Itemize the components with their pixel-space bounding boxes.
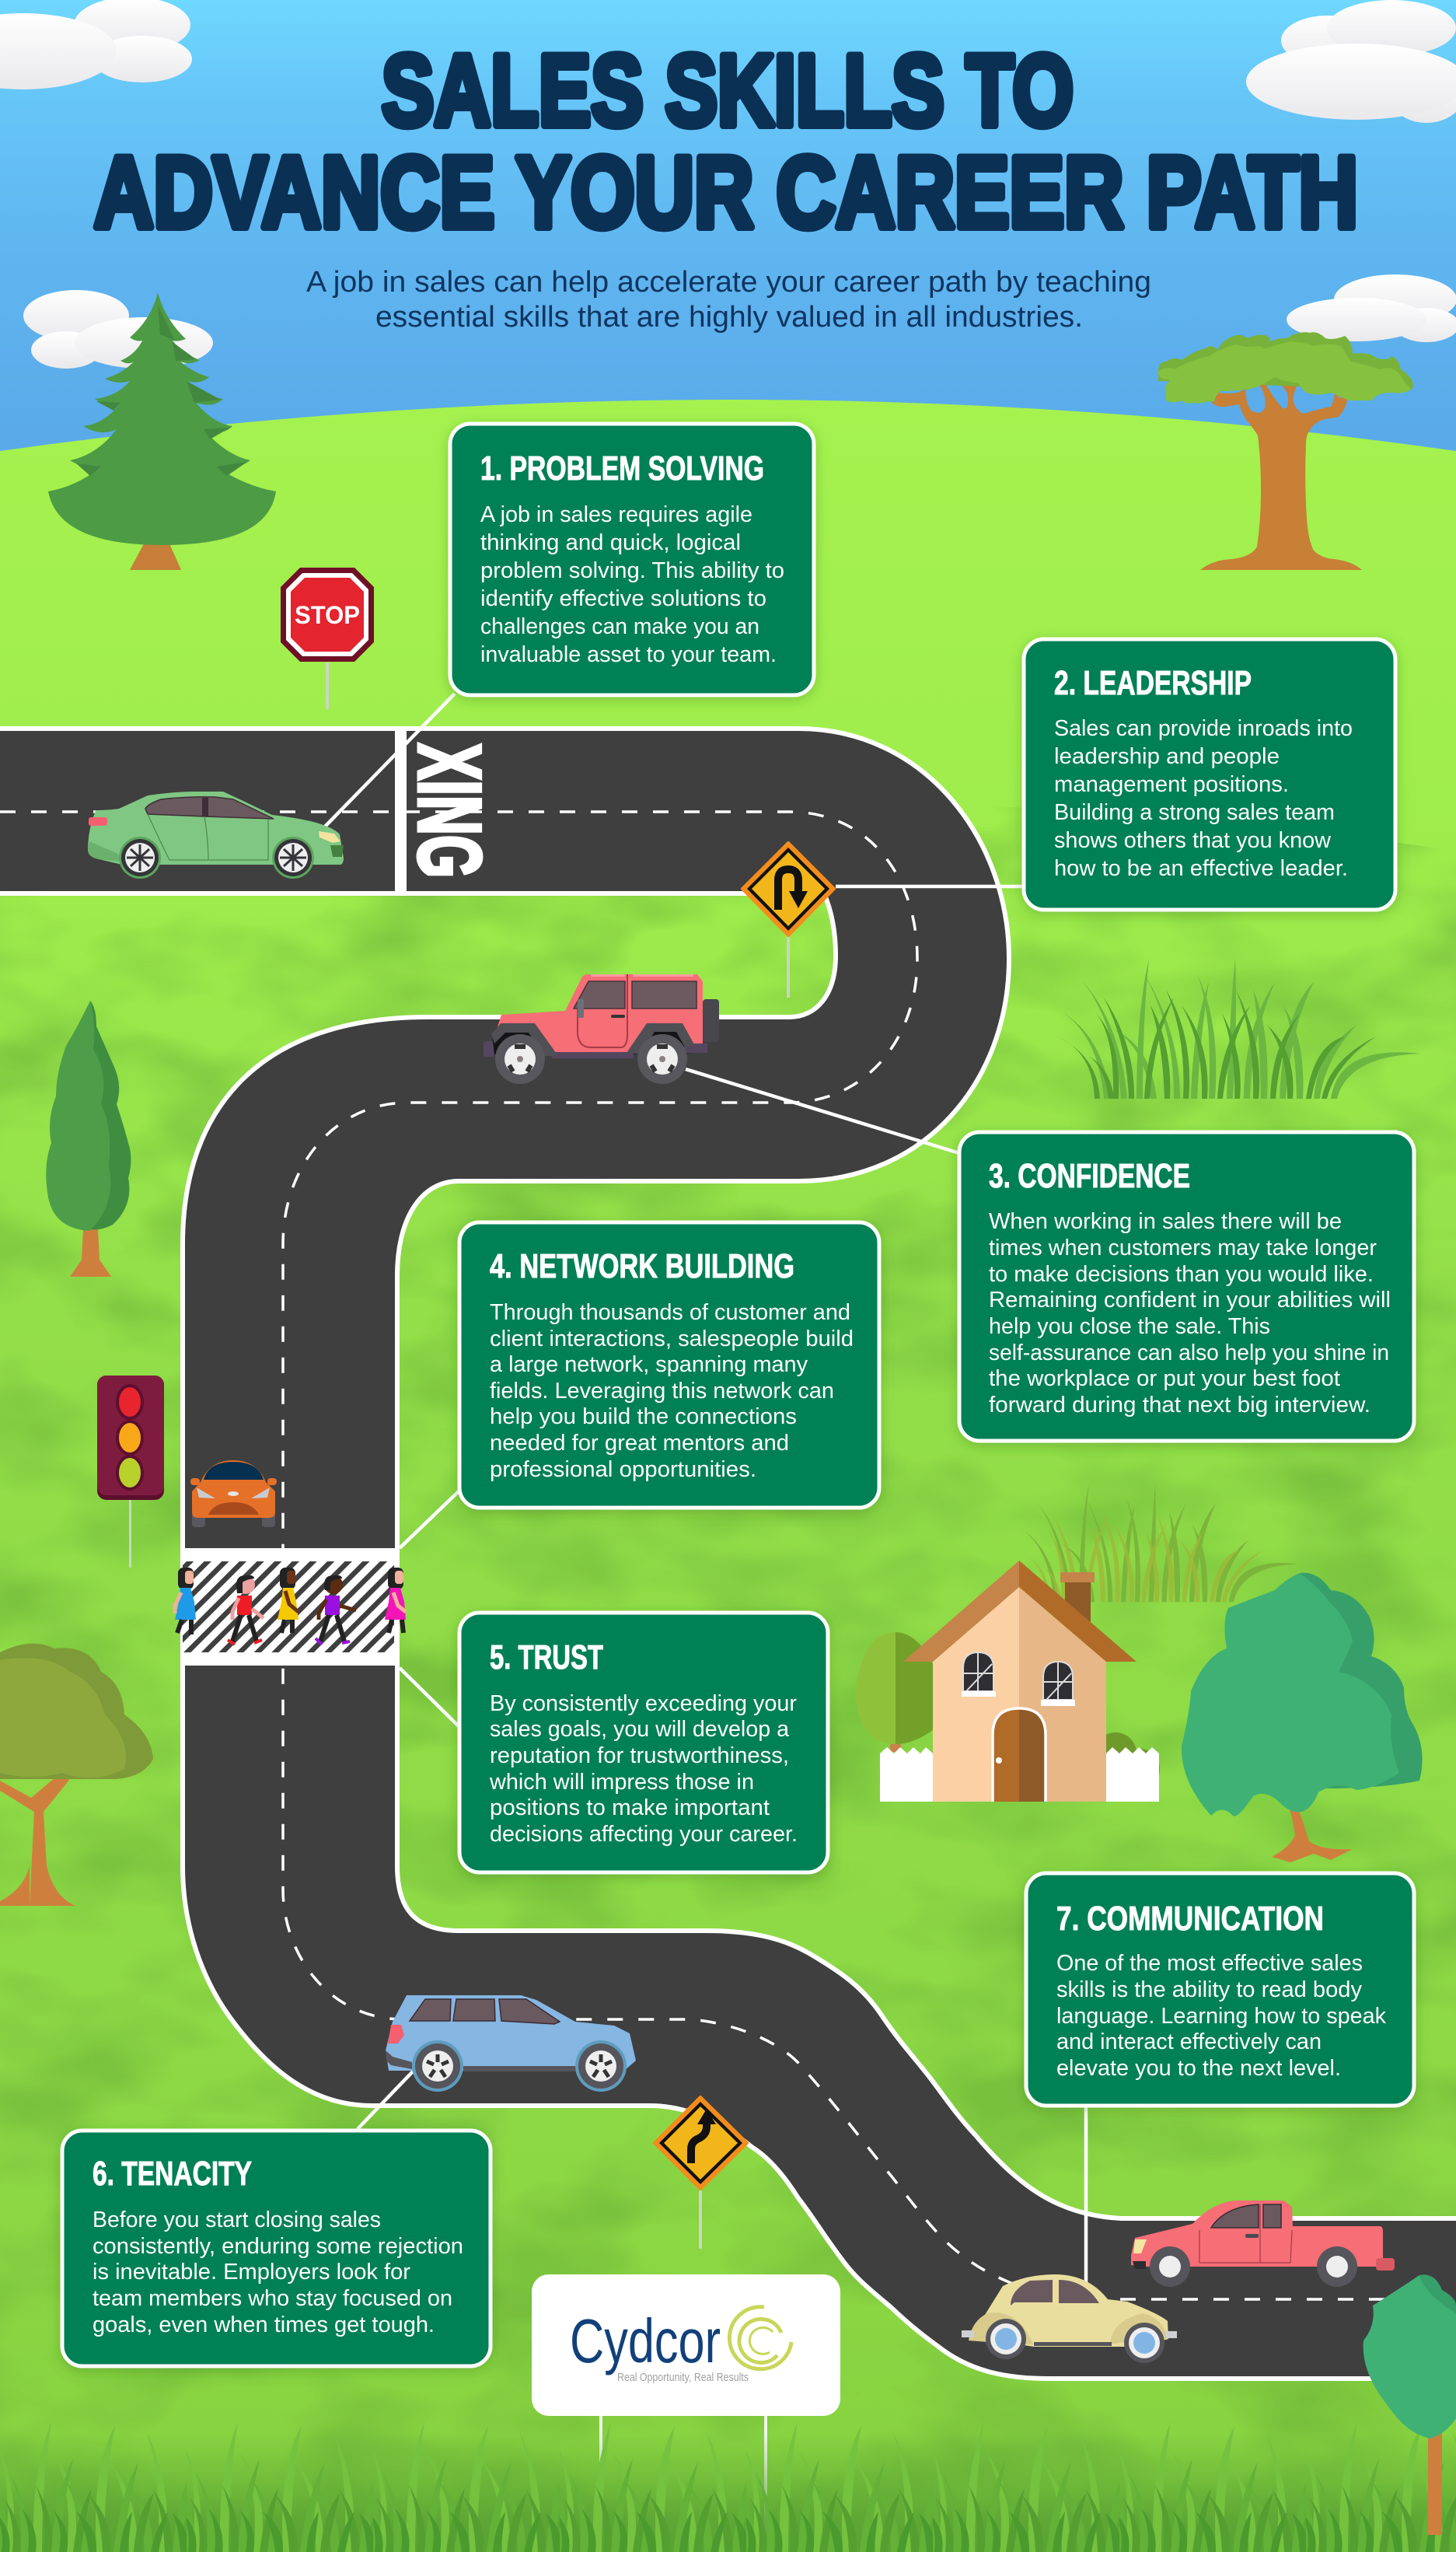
cloud: left middle	[23, 290, 213, 369]
fence	[880, 1747, 933, 1802]
body text	[1054, 716, 1353, 881]
grass tuft: behind house	[1015, 1484, 1298, 1602]
pedestrian: woman in pink	[385, 1568, 406, 1633]
body text: how to be an effective leader.	[1054, 856, 1348, 881]
sky background	[0, 0, 1456, 467]
title	[94, 33, 1358, 249]
logo sign	[532, 2274, 840, 2416]
body text: When working in sales there will be	[989, 1209, 1342, 1234]
subtitle	[306, 266, 1151, 334]
cloud: right middle	[1287, 274, 1456, 342]
house with fence and shrubs	[855, 1561, 1160, 1802]
body text: needed for great mentors and	[490, 1431, 789, 1456]
heading: 4. NETWORK BUILDING	[490, 1247, 794, 1285]
logo swirl	[729, 2307, 791, 2369]
body text: team members who stay focused on	[93, 2286, 452, 2311]
body text: help you close the sale. This	[989, 1314, 1270, 1339]
body text: is inevitable. Employers look for	[93, 2260, 411, 2285]
walls	[933, 1587, 1019, 1802]
logo wordmark: Cydcor	[570, 2306, 721, 2375]
body text	[490, 1300, 854, 1482]
logo tagline: Real Opportunity, Real Results	[617, 2371, 749, 2384]
body text: elevate you to the next level.	[1056, 2056, 1341, 2081]
panel: 2. leadership	[1024, 639, 1395, 910]
chimney	[1065, 1582, 1091, 1629]
tree: teal tree	[1182, 1573, 1423, 1862]
icon: curve sign	[655, 2097, 747, 2249]
subtitle: A job in sales can help accelerate your career path by teaching	[306, 266, 1151, 299]
body text: positions to make important	[490, 1795, 770, 1820]
panel: 6. tenacity	[62, 2131, 491, 2366]
body text: skills is the ability to read body	[1056, 1977, 1363, 2002]
pedestrian: woman in blue	[175, 1568, 196, 1634]
stop line and XING road marking	[395, 729, 498, 893]
body text: Remaining confident in your abilities will	[989, 1288, 1391, 1313]
body text: language. Learning how to speak	[1056, 2004, 1387, 2029]
tree: left olive tree	[0, 1644, 153, 1906]
heading: 1. PROBLEM SOLVING	[480, 449, 764, 488]
body text: Before you start closing sales	[93, 2208, 381, 2232]
icon: stop sign: STOP	[295, 601, 360, 629]
callout connector lines	[325, 694, 1086, 2289]
pedestrian: woman in yellow	[278, 1568, 299, 1633]
body text: leadership and people	[1054, 744, 1280, 769]
body text: reputation for trustworthiness,	[490, 1743, 789, 1768]
body text: help you build the connections	[490, 1404, 797, 1429]
tree: cypress	[46, 1001, 131, 1277]
body text: decisions affecting your career.	[490, 1822, 798, 1847]
heading: 6. TENACITY	[93, 2155, 252, 2193]
logo sign posts behind the grass	[599, 2414, 767, 2536]
body text: management positions.	[1054, 772, 1289, 797]
pedestrian: man in purple	[316, 1575, 356, 1645]
cloud: top left	[0, 0, 192, 89]
body text: times when customers may take longer	[989, 1236, 1377, 1260]
body text: challenges can make you an	[480, 614, 759, 639]
icon: traffic light	[97, 1376, 164, 1568]
body text	[989, 1209, 1391, 1418]
heading: 7. COMMUNICATION	[1056, 1900, 1324, 1938]
body text: a large network, spanning many	[490, 1352, 808, 1377]
body text: problem solving. This ability to	[480, 558, 784, 583]
tree: pine	[48, 292, 276, 570]
body text: the workplace or put your best foot	[989, 1366, 1340, 1391]
body text: Through thousands of customer and	[490, 1300, 850, 1325]
body text: professional opportunities.	[490, 1457, 756, 1482]
body text	[93, 2208, 463, 2337]
tree: bottom right	[1363, 2274, 1456, 2535]
body text: which will impress those in	[489, 1770, 754, 1795]
body text: shows others that you know	[1054, 828, 1331, 853]
vehicle: blue car	[386, 1995, 636, 2092]
vehicle: beetle	[962, 2274, 1177, 2363]
road center dashed line	[0, 812, 1456, 2299]
crosswalk	[180, 1548, 397, 1666]
vehicle: red pickup	[1131, 2201, 1395, 2287]
bottom grass	[0, 2410, 1456, 2552]
body text: Sales can provide inroads into	[1054, 716, 1353, 741]
shrub tree	[855, 1632, 896, 1744]
road	[0, 729, 1456, 2379]
panel: 4. network building	[459, 1222, 879, 1508]
cloud: top right	[1246, 0, 1456, 123]
grass tuft: right of road	[1053, 959, 1421, 1099]
door	[993, 1708, 1019, 1802]
roof	[903, 1561, 1019, 1662]
vehicle: red jeep	[484, 974, 719, 1084]
body text: to make decisions than you would like.	[989, 1262, 1374, 1287]
body text: and interact effectively can	[1056, 2029, 1322, 2054]
body text: One of the most effective sales	[1056, 1951, 1363, 1976]
body text: self-assurance can also help you shine in	[989, 1341, 1389, 1365]
vehicle: green car	[88, 792, 344, 879]
icon: stop sign	[281, 568, 374, 709]
body text: sales goals, you will develop a	[490, 1717, 789, 1742]
panel: 7. communication	[1026, 1873, 1414, 2106]
body text: client interactions, salespeople build	[490, 1327, 854, 1351]
windows	[963, 1652, 993, 1691]
body text	[1056, 1951, 1387, 2081]
heading: 2. LEADERSHIP	[1054, 664, 1252, 702]
panel: 3. confidence	[959, 1132, 1414, 1441]
vehicle: orange car	[190, 1460, 277, 1527]
panel: 5. trust	[459, 1613, 828, 1872]
pedestrians	[175, 1568, 406, 1645]
body text: Building a strong sales team	[1054, 800, 1335, 825]
body text: consistently, enduring some rejection	[93, 2234, 463, 2259]
body text: invaluable asset to your team.	[480, 642, 777, 667]
title: SALES SKILLS TO	[382, 33, 1074, 147]
panel: 1. problem solving	[450, 424, 814, 695]
icon: u-turn sign	[742, 843, 834, 998]
heading: 5. TRUST	[490, 1638, 603, 1676]
body text: thinking and quick, logical	[480, 530, 741, 555]
pedestrian: man in red	[228, 1575, 264, 1645]
body text: goals, even when times get tough.	[93, 2313, 435, 2337]
tree: acacia	[1158, 332, 1413, 570]
subtitle: essential skills that are highly valued in all industries.	[375, 301, 1083, 334]
body text	[480, 502, 784, 667]
stop line and XING road marking: XING	[400, 743, 498, 878]
body text	[489, 1691, 798, 1847]
body text: forward during that next big interview.	[989, 1393, 1370, 1418]
body text: By consistently exceeding your	[490, 1691, 798, 1716]
body text: identify effective solutions to	[480, 586, 766, 611]
body text: A job in sales requires agile	[480, 502, 752, 527]
body text: fields. Leveraging this network can	[490, 1379, 834, 1404]
heading: 3. CONFIDENCE	[989, 1157, 1190, 1195]
